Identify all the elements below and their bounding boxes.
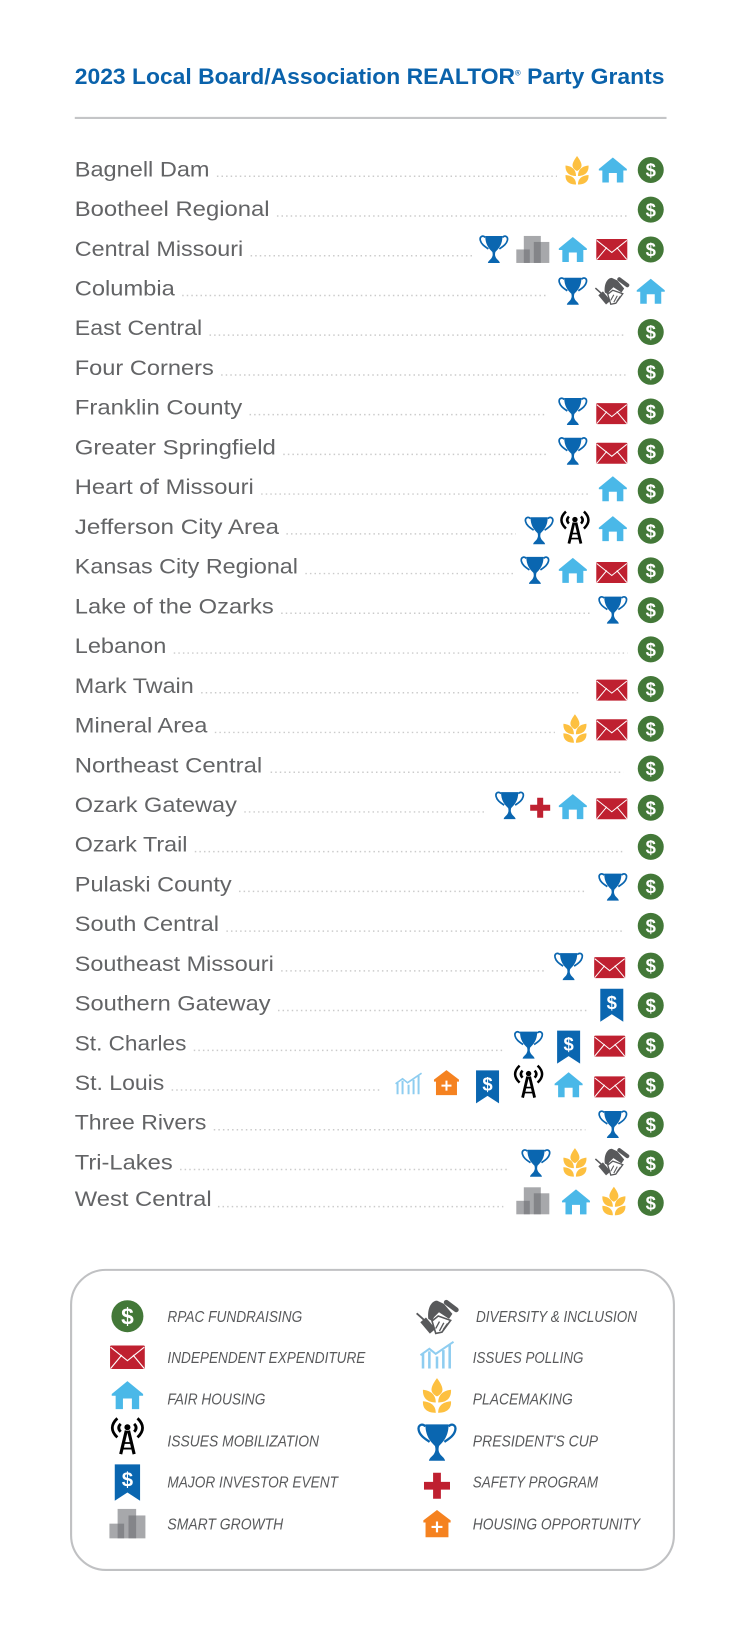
row: Four Corners [75,355,664,385]
icon: smart growth [516,236,549,263]
row: Bootheel Regional: Bootheel Regional [75,196,270,221]
icon: independent expenditure [596,680,627,701]
legend item: independent expenditure [110,1346,366,1369]
legend item: smart growth [109,1509,284,1538]
legend item: safety program: SAFETY PROGRAM [473,1474,599,1491]
icon: RPAC fundraising [638,676,664,702]
legend item: placemaking: PLACEMAKING [473,1392,573,1409]
row: West Central: West Central [75,1186,212,1211]
row: Columbia [75,275,665,305]
row: Three Rivers: Three Rivers [75,1110,207,1135]
icon: president's cup [480,236,508,263]
row: Lake of the Ozarks [75,593,664,624]
icon: independent expenditure [596,239,627,260]
legend item: housing opportunity: HOUSING OPPORTUNITY [473,1516,642,1533]
icon: president's cup [599,1111,627,1138]
icon: RPAC fundraising [638,795,664,821]
icon: fair housing [559,794,587,819]
icon: fair housing [599,157,627,182]
icon: placemaking [563,714,586,743]
icon: independent expenditure [594,1076,625,1097]
title: Party Grants [521,64,664,89]
icon: president's cup [559,278,587,305]
row: Columbia: Columbia [75,275,175,300]
icon: RPAC fundraising [638,557,664,583]
legend item: major investor event: MAJOR INVESTOR EVENT [167,1474,339,1491]
icon: president's cup [521,557,549,584]
icon: diversity and inclusion [595,278,627,304]
icon: RPAC fundraising [638,359,664,385]
row: Central Missouri [75,236,664,263]
icon: president's cup [559,438,587,465]
legend item: housing opportunity [423,1510,642,1537]
row: Mineral Area: Mineral Area [75,712,207,737]
row: Lake of the Ozarks: Lake of the Ozarks [75,593,274,618]
row: Three Rivers [75,1110,664,1138]
icon: placemaking [563,1148,586,1177]
legend item: RPAC fundraising [111,1300,302,1332]
icon: president's cup [555,953,582,980]
row: Mineral Area [75,712,664,743]
icon: RPAC fundraising [638,518,664,544]
icon: RPAC fundraising [638,157,664,183]
icon: independent expenditure [596,562,627,583]
legend item: fair housing [112,1381,265,1409]
legend item: major investor event [115,1464,339,1501]
legend item: issues polling [420,1342,583,1369]
row: Northeast Central [75,752,664,782]
icon: president's cup [559,398,587,425]
row: Four Corners: Four Corners [75,355,214,380]
icon: independent expenditure [596,719,627,740]
row: Lebanon [75,633,664,662]
row: Southeast Missouri [75,951,664,980]
icon: fair housing [559,558,587,583]
row: Southeast Missouri: Southeast Missouri [75,951,274,976]
icon: president's cup [515,1032,542,1059]
icon: independent expenditure [596,403,627,424]
icon: RPAC fundraising [638,319,664,345]
legend item: president's cup: PRESIDENT'S CUP [473,1433,599,1450]
icon: issues polling [396,1073,422,1094]
legend item: president's cup [419,1424,599,1461]
icon: RPAC fundraising [638,756,664,782]
row: Lebanon: Lebanon [75,633,166,658]
legend item: issues mobilization [112,1418,320,1454]
row: Southern Gateway [75,989,664,1022]
icon: fair housing [599,516,627,541]
row: Heart of Missouri: Heart of Missouri [75,474,254,499]
row: Bagnell Dam: Bagnell Dam [75,156,210,181]
row: Franklin County: Franklin County [75,395,242,420]
icon: independent expenditure [596,443,627,464]
row: St. Charles: St. Charles [75,1030,187,1055]
row: Mark Twain: Mark Twain [75,673,194,698]
icon: RPAC fundraising [638,236,664,262]
legend item: fair housing: FAIR HOUSING [167,1392,265,1409]
icon: RPAC fundraising [638,478,664,504]
icon: RPAC fundraising [638,1111,664,1137]
legend item: safety program [424,1473,599,1499]
icon: RPAC fundraising [638,636,664,662]
icon: fair housing [562,1189,590,1214]
row: South Central: South Central [75,911,219,936]
row: Jefferson City Area: Jefferson City Area [75,514,279,539]
row: Bagnell Dam [75,156,664,184]
icon: independent expenditure [594,957,625,978]
row: East Central [75,315,664,345]
legend item: diversity and inclusion: DIVERSITY & INCLUSION [476,1309,638,1326]
row: Tri-Lakes [75,1148,664,1177]
icon: RPAC fundraising [638,913,664,939]
row: Mark Twain [75,673,664,702]
icon: president's cup [599,597,627,624]
row: St. Louis: St. Louis [75,1070,164,1095]
grants list [75,156,665,1216]
icon: fair housing [559,237,587,262]
icon: smart growth [516,1187,549,1214]
row: Bootheel Regional [75,196,664,223]
row: Ozark Gateway: Ozark Gateway [75,792,237,817]
row: Franklin County [75,395,664,425]
icon: major investor event [557,1031,580,1064]
row: Ozark Trail [75,832,664,860]
icon: issues mobilization [561,512,588,544]
row: Northeast Central: Northeast Central [75,752,262,777]
title: ® [515,69,521,78]
row: Greater Springfield [75,434,664,465]
icon: RPAC fundraising [638,953,664,979]
row: St. Louis [75,1066,664,1103]
icon: fair housing [599,476,627,501]
row: Pulaski County [75,871,664,901]
row: Heart of Missouri [75,474,664,504]
icon: president's cup [496,792,523,819]
icon: fair housing [637,279,665,304]
icon: RPAC fundraising [638,197,664,223]
row: Kansas City Regional [75,554,664,584]
icon: fair housing [555,1072,583,1097]
icon: RPAC fundraising [638,1150,664,1176]
legend item: issues polling: ISSUES POLLING [473,1350,583,1367]
row: Ozark Trail: Ozark Trail [75,832,187,857]
icon: president's cup [525,517,553,544]
row: East Central: East Central [75,315,202,340]
row: Central Missouri: Central Missouri [75,236,243,261]
icon: major investor event [600,989,623,1022]
legend item: independent expenditure: INDEPENDENT EXPENDITURE [167,1350,366,1367]
title: 2023 Local Board/Association REALTOR [75,64,496,89]
icon: independent expenditure [596,798,627,819]
icon: independent expenditure [594,1036,625,1057]
row: West Central [75,1186,664,1216]
legend item: smart growth: SMART GROWTH [167,1516,284,1533]
row: Tri-Lakes: Tri-Lakes [75,1150,173,1175]
icon: RPAC fundraising [638,1032,664,1058]
row: Southern Gateway: Southern Gateway [75,991,271,1016]
icon: president's cup [522,1150,550,1177]
icon: RPAC fundraising [638,597,664,623]
icon: RPAC fundraising [638,398,664,425]
row: South Central [75,911,664,939]
icon: president's cup [599,874,627,901]
legend item: issues mobilization: ISSUES MOBILIZATION [167,1433,320,1450]
row: Greater Springfield: Greater Springfield [75,434,276,459]
row: Jefferson City Area [75,512,664,544]
icon: placemaking [602,1187,625,1215]
icon: RPAC fundraising [638,438,664,464]
icon: RPAC fundraising [638,992,664,1018]
row: Ozark Gateway [75,792,664,821]
row: St. Charles [75,1030,664,1064]
row: Kansas City Regional: Kansas City Regional [75,554,298,579]
icon: RPAC fundraising [638,1072,664,1098]
icon: housing opportunity [434,1070,459,1095]
icon: RPAC fundraising [638,874,664,900]
icon: safety program [530,798,550,818]
row: Pulaski County: Pulaski County [75,871,232,896]
icon: RPAC fundraising [638,834,664,860]
legend item: placemaking [423,1378,573,1413]
icon: major investor event [476,1070,499,1103]
icon: RPAC fundraising [638,1190,664,1216]
icon: diversity and inclusion [595,1149,627,1175]
icon: issues mobilization [515,1066,542,1098]
icon: RPAC fundraising [638,716,664,742]
legend item: RPAC fundraising: RPAC FUNDRAISING [167,1309,302,1326]
panel: legend [71,1270,674,1570]
icon: placemaking [565,156,589,184]
legend item: diversity and inclusion [417,1301,638,1334]
